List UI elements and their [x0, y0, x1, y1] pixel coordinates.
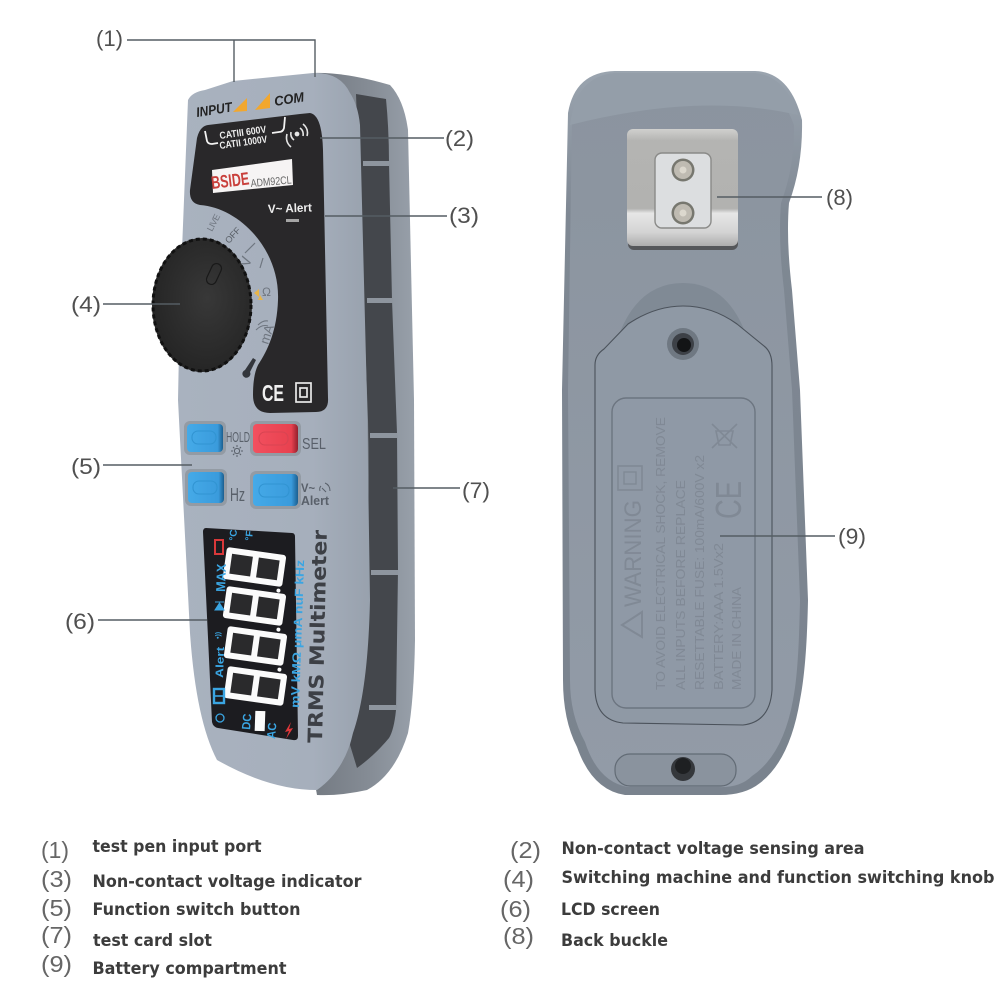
dial markings: V: [237, 254, 256, 269]
function buttons: [184, 421, 301, 509]
callout (7): (7): [462, 478, 490, 503]
callout (8): (8): [826, 185, 853, 210]
LCD indicators: MAX: [213, 563, 229, 592]
icon: double insulation: [296, 383, 311, 402]
legend item 5: Function switch button: [92, 900, 300, 920]
brand label: BSIDE: [210, 168, 250, 193]
callout (4): [71, 292, 180, 317]
callout (7): [393, 478, 490, 503]
legend item 9: Battery compartment: [92, 959, 286, 979]
outer side shell: [300, 73, 415, 795]
rotary knob: [152, 238, 252, 372]
port label: INPUT / COM: COM: [273, 89, 306, 109]
port label: INPUT / COM: [195, 89, 306, 120]
dial markings: [205, 212, 277, 378]
LCD indicators: °F: [244, 530, 256, 541]
dial markings: LIVE: [205, 212, 222, 233]
legend item 6: LCD screen: [561, 900, 660, 920]
device: back view: [562, 71, 808, 795]
CAT rating: CATIII 600V: [219, 124, 267, 142]
LCD indicators: Alert: [214, 646, 227, 678]
legend item 8: Back buckle: [561, 931, 668, 951]
callout (5): (5): [71, 454, 101, 479]
legend item 5: (5): [41, 895, 72, 921]
brand label: [210, 159, 293, 193]
callout (2): (2): [445, 126, 474, 151]
legend item 4: (4): [503, 866, 534, 892]
battery label plate: WARNING: [620, 500, 647, 607]
legend item 2: [510, 837, 864, 863]
LCD indicators: °C: [228, 529, 240, 541]
callout (4): (4): [71, 292, 101, 317]
battery label plate: RESETTABLE FUSE: 100mA/600V x2: [692, 455, 707, 690]
legend item 9: [41, 951, 286, 979]
legend item 6: [500, 896, 660, 922]
warning triangle: [622, 612, 642, 637]
CAT rating: [205, 117, 285, 152]
legend item 3: Non-contact voltage indicator: [92, 872, 362, 892]
port label: INPUT / COM: INPUT: [195, 99, 235, 120]
icon: voltage sensing waves: [286, 124, 308, 147]
button labels: Hz: [230, 485, 245, 505]
indicator: V~ Alert: V~ Alert: [268, 200, 312, 216]
legend: [41, 837, 994, 979]
icon: thermometer: [242, 358, 256, 378]
top highlight: [570, 73, 798, 125]
LCD indicators: [213, 529, 307, 739]
battery label plate: ALL INPUTS BEFORE REPLACE: [673, 480, 688, 690]
callout (5): [71, 454, 192, 479]
LCD indicators: AC: [264, 722, 279, 739]
cover dome: [620, 283, 745, 332]
bottom slot with screw hole: [615, 754, 736, 786]
legend item 8: [503, 923, 668, 951]
legend item 7: [41, 922, 212, 951]
battery compartment cover: [595, 306, 772, 725]
LCD screen: [203, 528, 307, 740]
legend item 7: (7): [41, 922, 72, 948]
button labels: SEL: [302, 436, 326, 453]
callout (6): (6): [65, 609, 95, 634]
side recess: test card slot: [350, 94, 398, 768]
button labels: HOLD: [226, 429, 250, 446]
legend item 6: (6): [500, 896, 531, 922]
LCD digits: [222, 547, 287, 731]
callout (1): (1): [96, 26, 123, 51]
battery label plate: MADE IN CHINA: [729, 587, 744, 690]
callout (9): (9): [838, 524, 866, 549]
legend item 2: (2): [510, 837, 541, 863]
device: front view: [152, 73, 415, 795]
legend item 9: (9): [41, 951, 72, 977]
button labels: V~: [301, 481, 315, 495]
dial markings: mA: [257, 322, 277, 346]
CAT rating: CATII 1000V: [219, 134, 268, 152]
battery label plate: TO AVOID ELECTRICAL SHOCK, REMOVE: [653, 417, 668, 690]
battery label plate: CE: [708, 481, 749, 519]
callout (8): [717, 185, 853, 210]
battery label plate: BATTERY:AAA 1.5Vx2: [711, 543, 726, 690]
legend item 1: (1): [41, 837, 69, 863]
legend item 3: [41, 866, 362, 892]
legend item 5: [41, 895, 300, 921]
legend item 8: (8): [503, 923, 534, 949]
back buckle clip: [627, 129, 738, 250]
LCD indicators: mV kMΩ μmA nuF kHz: [288, 560, 307, 708]
brand label: ADM92CL: [250, 174, 292, 190]
CE mark: CE: [262, 380, 284, 406]
callout (1): [96, 26, 315, 82]
LCD indicators: DC: [239, 713, 254, 730]
button labels: [226, 429, 330, 508]
LCD indicators: •)): [215, 632, 222, 639]
button labels: Alert: [301, 493, 330, 508]
legend item 7: test card slot: [93, 931, 212, 951]
mounting screw hole: [667, 328, 699, 360]
back body: [562, 71, 808, 795]
callout (3): (3): [449, 203, 479, 228]
dial markings: OFF: [223, 225, 243, 245]
model name: TRMS Multimeter: [303, 529, 332, 743]
legend item 2: Non-contact voltage sensing area: [562, 839, 864, 859]
battery label plate: [612, 398, 755, 708]
dial markings: Ω: [262, 285, 271, 299]
legend item 4: [503, 866, 994, 892]
front face: [178, 73, 370, 790]
legend item 1: [41, 837, 262, 863]
black control panel: [190, 113, 328, 413]
legend item 1: test pen input port: [92, 837, 262, 857]
legend item 3: (3): [41, 866, 72, 892]
